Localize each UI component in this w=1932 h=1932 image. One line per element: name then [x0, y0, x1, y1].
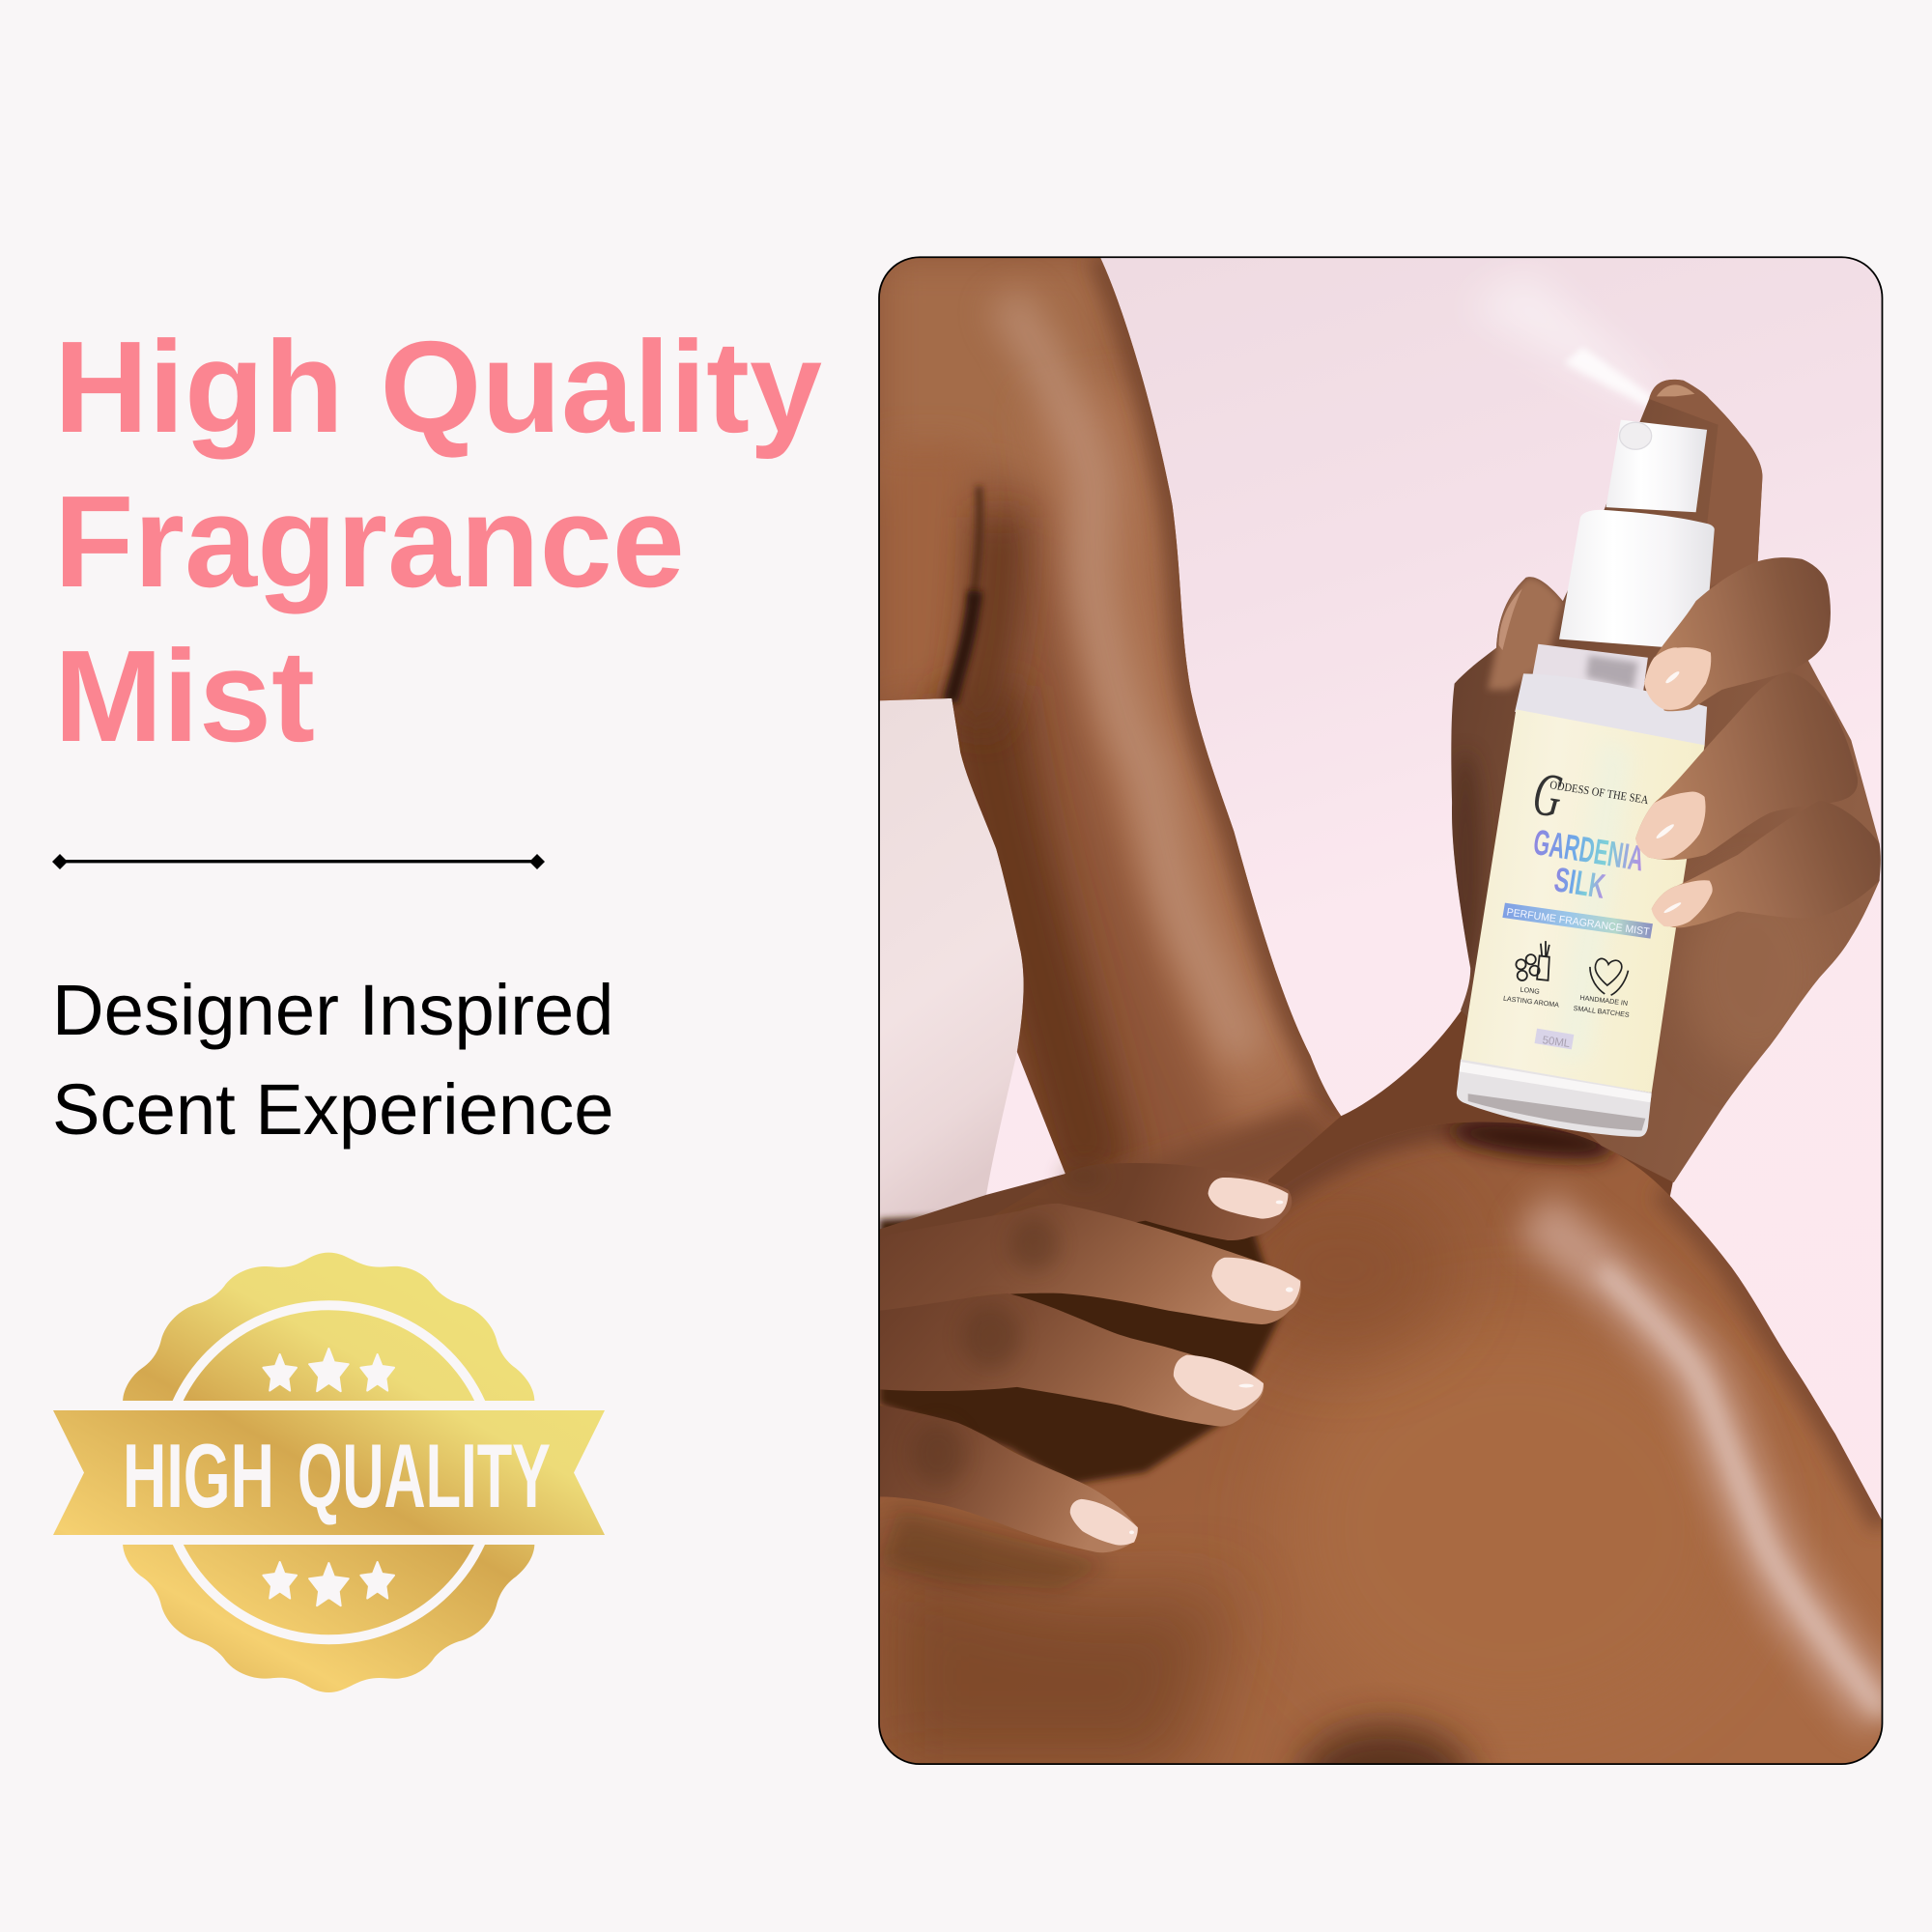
size tag: [1535, 1029, 1574, 1050]
brand name: [1528, 760, 1650, 831]
holographic sheen: [1554, 739, 1632, 1060]
badge text: HIGH: [123, 1425, 274, 1526]
frosted shoulder band: [1515, 673, 1707, 747]
bottle: [1457, 420, 1715, 1137]
collar: [1559, 510, 1715, 650]
finger shadows on leg: [879, 1509, 1108, 1589]
forearm behind knee: [1268, 1010, 1673, 1196]
product name: [1531, 822, 1647, 906]
dark area under fingers: [879, 1201, 1281, 1485]
product name: GARDENIA: [1531, 822, 1647, 878]
glass base: [1457, 1060, 1652, 1137]
right hand nails: [1635, 647, 1713, 926]
nails: [1070, 1178, 1300, 1546]
leg: [879, 1122, 1882, 1764]
ribbon banner: [53, 1410, 605, 1535]
title: [54, 314, 822, 769]
stars bottom: [263, 1562, 394, 1605]
icon: flower and diffuser: [1516, 941, 1549, 980]
hand back: [879, 1174, 1146, 1298]
icon captions: LASTING AROMA: [1503, 995, 1560, 1009]
knuckles: [911, 1164, 1106, 1486]
scalloped seal top: [123, 1252, 535, 1401]
panel border: [879, 257, 1882, 1764]
left hand: [879, 1163, 1301, 1589]
stars top: [263, 1349, 394, 1391]
mist spray: [1495, 285, 1652, 408]
subtitle: Scent Experience: [52, 1069, 613, 1150]
photo background: [986, 258, 1882, 1519]
icon captions: SMALL BATCHES: [1573, 1005, 1630, 1019]
finger b: [1635, 672, 1858, 860]
title: High Quality: [54, 314, 822, 460]
nozzle hole: [1620, 422, 1652, 449]
divider with diamond ends: [52, 854, 545, 869]
dress: [879, 697, 1024, 1230]
perfume band: PERFUME FRAGRANCE MIST: [1506, 906, 1651, 938]
icon captions: LONG: [1520, 986, 1541, 996]
badge text: [123, 1425, 551, 1526]
icon captions: HANDMADE IN: [1579, 994, 1628, 1008]
finger 1: [1065, 1163, 1292, 1240]
brand name: G: [1528, 760, 1567, 831]
title: Mist: [54, 623, 315, 769]
size tag: 50ML: [1542, 1035, 1571, 1050]
finger c: [1652, 801, 1881, 927]
finger a: [1644, 557, 1831, 711]
clear neck: [1532, 644, 1648, 712]
label body: [1461, 709, 1705, 1093]
arm and shoulder: [879, 258, 1341, 1182]
title: Fragrance: [54, 469, 685, 614]
icon captions: [1503, 986, 1630, 1019]
subtitle: [52, 970, 613, 1150]
product name: SILK: [1551, 860, 1607, 906]
right hand: fingers in front: [1635, 557, 1881, 927]
brand name: ODDESS OF THE SEA: [1548, 778, 1650, 807]
finger 2: [879, 1204, 1301, 1324]
badge: high quality gold seal: [53, 1252, 605, 1692]
pump nozzle: [1606, 420, 1707, 512]
right hand: palm, thumb and top finger: [1441, 369, 1885, 1195]
icon: heart in hands: [1590, 958, 1628, 995]
scalloped seal bottom: [123, 1545, 535, 1692]
finger 4: [879, 1406, 1138, 1552]
nail highlights: [1129, 1201, 1293, 1534]
right nail highlights: [1655, 669, 1682, 915]
subtitle: Designer Inspired: [52, 970, 613, 1050]
finger 3: [879, 1293, 1264, 1427]
panel: product photo: [878, 256, 1884, 1765]
